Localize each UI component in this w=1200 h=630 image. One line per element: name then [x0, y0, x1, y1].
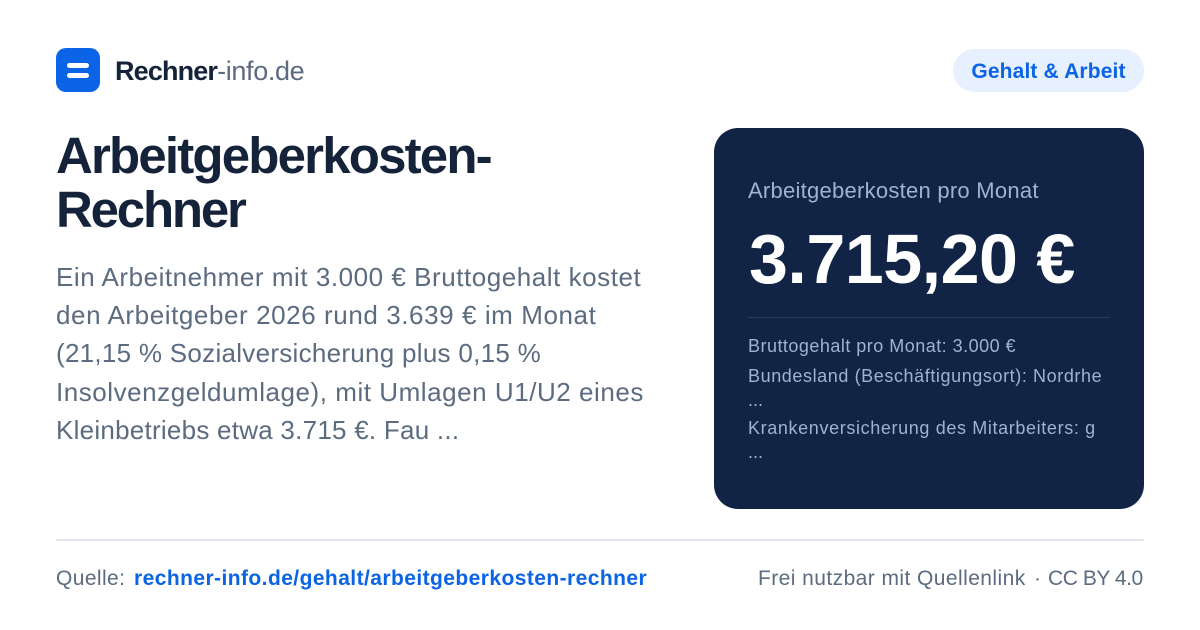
category badge [953, 49, 1144, 92]
result value: 3.715,20 € [749, 220, 1075, 298]
license note: Frei nutzbar mit Quellenlink [758, 567, 1026, 590]
detail: federal state: Bundesland (Beschäftigungsort): Nordrhe [748, 366, 1102, 386]
input details [748, 317, 1110, 464]
description: Insolvenzgeldumlage), mit Umlagen U1/U2 eines [56, 377, 644, 407]
detail: federal state [748, 366, 1102, 410]
description: Ein Arbeitnehmer mit 3.000 € Bruttogehalt kostet [56, 262, 641, 292]
license note: CC BY 4.0 [1048, 567, 1143, 590]
detail: health insurance: ... [748, 442, 763, 462]
icon: logo mark [56, 48, 100, 92]
panel: result [714, 128, 1144, 509]
description: Kleinbetriebs etwa 3.715 €. Fau ... [56, 415, 459, 445]
description: (21,15 % Sozialversicherung plus 0,15 % [56, 338, 541, 368]
title [56, 127, 491, 238]
license note: · [1034, 567, 1041, 590]
license note [758, 567, 1143, 590]
brand name: Rechner-info.de [115, 56, 304, 86]
title: Rechner [56, 181, 245, 238]
title: Arbeitgeberkosten- [56, 127, 491, 184]
category badge: Gehalt & Arbeit [971, 60, 1126, 83]
description: den Arbeitgeber 2026 rund 3.639 € im Monat [56, 300, 596, 330]
footer [56, 539, 1144, 601]
source link: rechner-info.de/gehalt/arbeitgeberkosten-rechner [134, 567, 647, 590]
detail: gross salary: Bruttogehalt pro Monat: 3.000 € [748, 336, 1016, 356]
detail: health insurance [748, 418, 1096, 462]
result label: Arbeitgeberkosten pro Monat [748, 178, 1039, 203]
detail: health insurance: Krankenversicherung des Mitarbeiters: g [748, 418, 1096, 438]
detail: federal state: ... [748, 390, 763, 410]
logo [56, 48, 304, 92]
description [56, 262, 644, 445]
source label: Quelle: [56, 567, 125, 590]
